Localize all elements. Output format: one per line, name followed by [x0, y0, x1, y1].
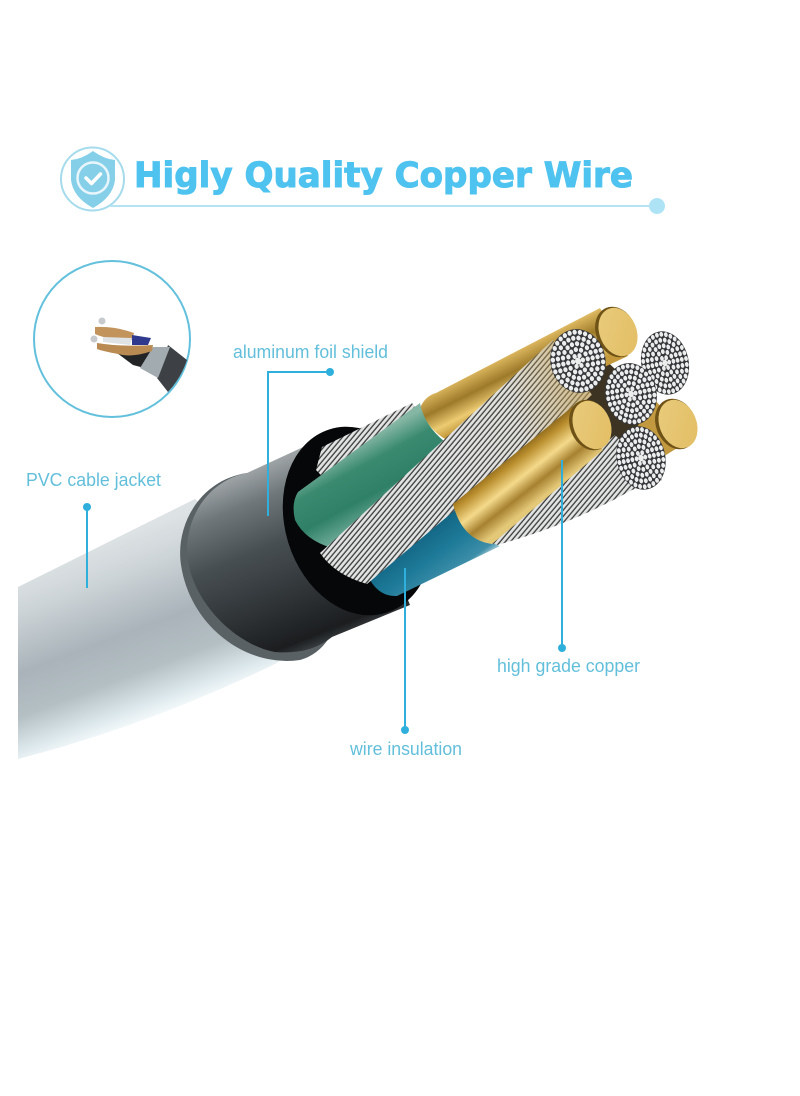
callout: PVC cable jacket	[26, 470, 161, 588]
rear strand	[490, 435, 662, 546]
green insulation	[294, 403, 445, 548]
tip: strand center	[600, 358, 662, 430]
callout: PVC cable jacket: PVC cable jacket	[26, 470, 161, 490]
upper rear strand	[316, 403, 428, 495]
inset circle: small cable photo	[34, 261, 190, 417]
PVC jacket	[18, 499, 330, 759]
callout: aluminum foil shield: aluminum foil shield	[233, 342, 388, 362]
mini cable	[90, 318, 187, 392]
main strand	[320, 340, 592, 584]
title text: Higly Quality Copper Wire	[134, 156, 633, 196]
icon: shield badge	[61, 148, 124, 210]
callout: wire insulation	[349, 568, 462, 759]
callout: high grade copper	[497, 460, 640, 676]
aluminum foil sleeve	[187, 430, 410, 652]
cable illustration	[18, 300, 705, 759]
callout: wire insulation: wire insulation	[349, 739, 462, 759]
blue insulation	[370, 503, 500, 596]
tip: strand lower right	[611, 422, 671, 494]
sleeve flange	[180, 473, 329, 661]
sleeve opening	[260, 408, 456, 634]
callout: aluminum foil shield	[233, 342, 388, 516]
title underline	[110, 198, 665, 214]
title heading with badge	[61, 148, 665, 214]
tip: strand main	[544, 324, 612, 398]
tip: strand far right	[635, 327, 695, 399]
gold wire front	[453, 393, 619, 544]
callout: high grade copper: high grade copper	[497, 656, 640, 676]
gold wire right	[635, 392, 705, 465]
wire backing	[400, 345, 668, 570]
gold wire rear	[420, 300, 645, 440]
